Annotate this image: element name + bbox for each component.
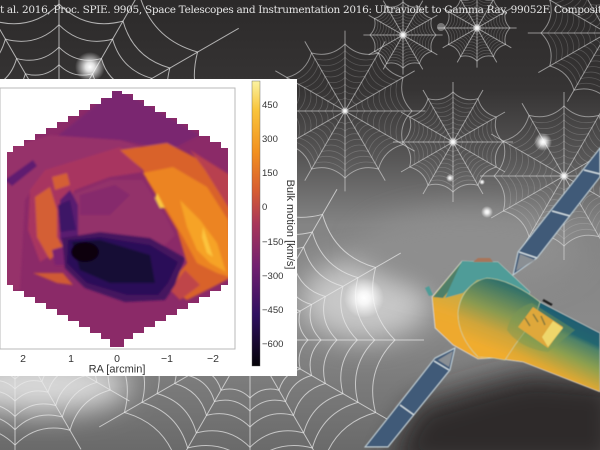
axis tick labels (20, 353, 219, 365)
spacecraft rear body (493, 298, 600, 392)
instrument notch (518, 307, 563, 348)
panel: bulk motion map figure (0, 79, 297, 376)
notch surround (507, 303, 575, 352)
colour bar labels: −450 (262, 305, 283, 316)
top reddish detail (473, 258, 493, 262)
axis tick labels: −1 (161, 353, 173, 365)
colour bar labels: 450 (262, 100, 278, 111)
solar panel: lower (365, 348, 455, 447)
spacecraft front hexagonal section (432, 261, 540, 359)
antenna stub (425, 286, 433, 296)
stars (75, 23, 569, 318)
map axes frame (0, 88, 235, 349)
colour bar labels: 150 (262, 168, 278, 179)
citation text: t al. 2016, Proc. SPIE. 9905, Space Telescopes and Instrumentation 2016: Ultraviolet to Gamma Ray, 99052F. Composit (0, 4, 600, 16)
axis tick labels: 1 (68, 353, 74, 365)
dark facet (433, 262, 470, 298)
axis tick labels: −2 (207, 353, 219, 365)
solar panel: upper (513, 148, 600, 275)
telescope cylinder (458, 278, 540, 360)
colour bar title: Bulk motion [km/s] (284, 180, 296, 269)
axis tick labels: 2 (20, 353, 26, 365)
teal top plate (445, 261, 530, 298)
colour bar labels: 300 (262, 134, 278, 145)
dark bracket (543, 300, 552, 305)
velocity map hexagon (0, 85, 235, 350)
x axis title: RA [arcmin] (89, 364, 145, 376)
colour bar labels (262, 100, 283, 350)
colour bar (252, 81, 260, 366)
satellite (365, 148, 600, 447)
axis tick labels: 0 (114, 353, 120, 365)
colour bar labels: −300 (262, 271, 283, 282)
colour bar labels: −150 (262, 237, 283, 248)
colour bar labels: 0 (262, 202, 267, 213)
colour bar labels: −600 (262, 339, 283, 350)
